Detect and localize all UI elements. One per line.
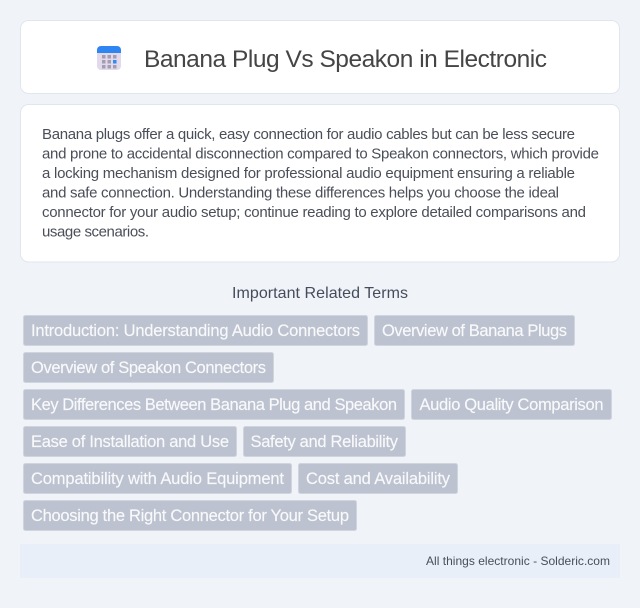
tag list [24,316,612,530]
summary text: a locking mechanism designed for professional audio equipment ensuring a reliable [42,165,575,182]
tag [298,464,458,494]
summary text: and prone to accidental disconnection compared to Speakon connectors, which provide [42,146,599,162]
summary text: connector for your audio setup; continue reading to explore detailed comparisons and [42,204,586,221]
tag: Choosing the Right Connector for Your Setup [31,507,349,525]
tag: Overview of Banana Plugs [382,322,567,340]
tag: Compatibility with Audio Equipment [31,470,284,488]
panel: header [20,20,620,94]
summary text: Banana plugs offer a quick, easy connection for audio cables but can be less secure [42,126,575,143]
tag: Audio Quality Comparison [420,396,604,414]
tag [244,426,406,456]
tag: Key Differences Between Banana Plug and Speakon [31,396,397,414]
footer: All things electronic - Solderic.com [426,554,610,568]
tag: Cost and Availability [306,470,451,488]
tag [24,500,356,530]
tag: Safety and Reliability [250,433,399,451]
tag [374,316,574,346]
tag [24,464,292,494]
summary text: and safe connection. Understanding these differences helps you choose the ideal [42,184,559,202]
icon: calendar [97,46,121,70]
panel: summary [20,104,620,262]
tag [24,390,404,420]
summary text: usage scenarios. [42,224,149,240]
tag [24,426,236,456]
heading: related terms: Important Related Terms [232,285,408,302]
tag [24,316,368,346]
footer [20,544,620,578]
title: Banana Plug Vs Speakon in Electronic [144,46,547,73]
tag: Introduction: Understanding Audio Connectors [31,322,360,340]
tag [412,390,612,420]
tag: Ease of Installation and Use [31,433,229,451]
tag [24,352,274,382]
tag: Overview of Speakon Connectors [31,359,266,377]
summary text [42,126,599,240]
